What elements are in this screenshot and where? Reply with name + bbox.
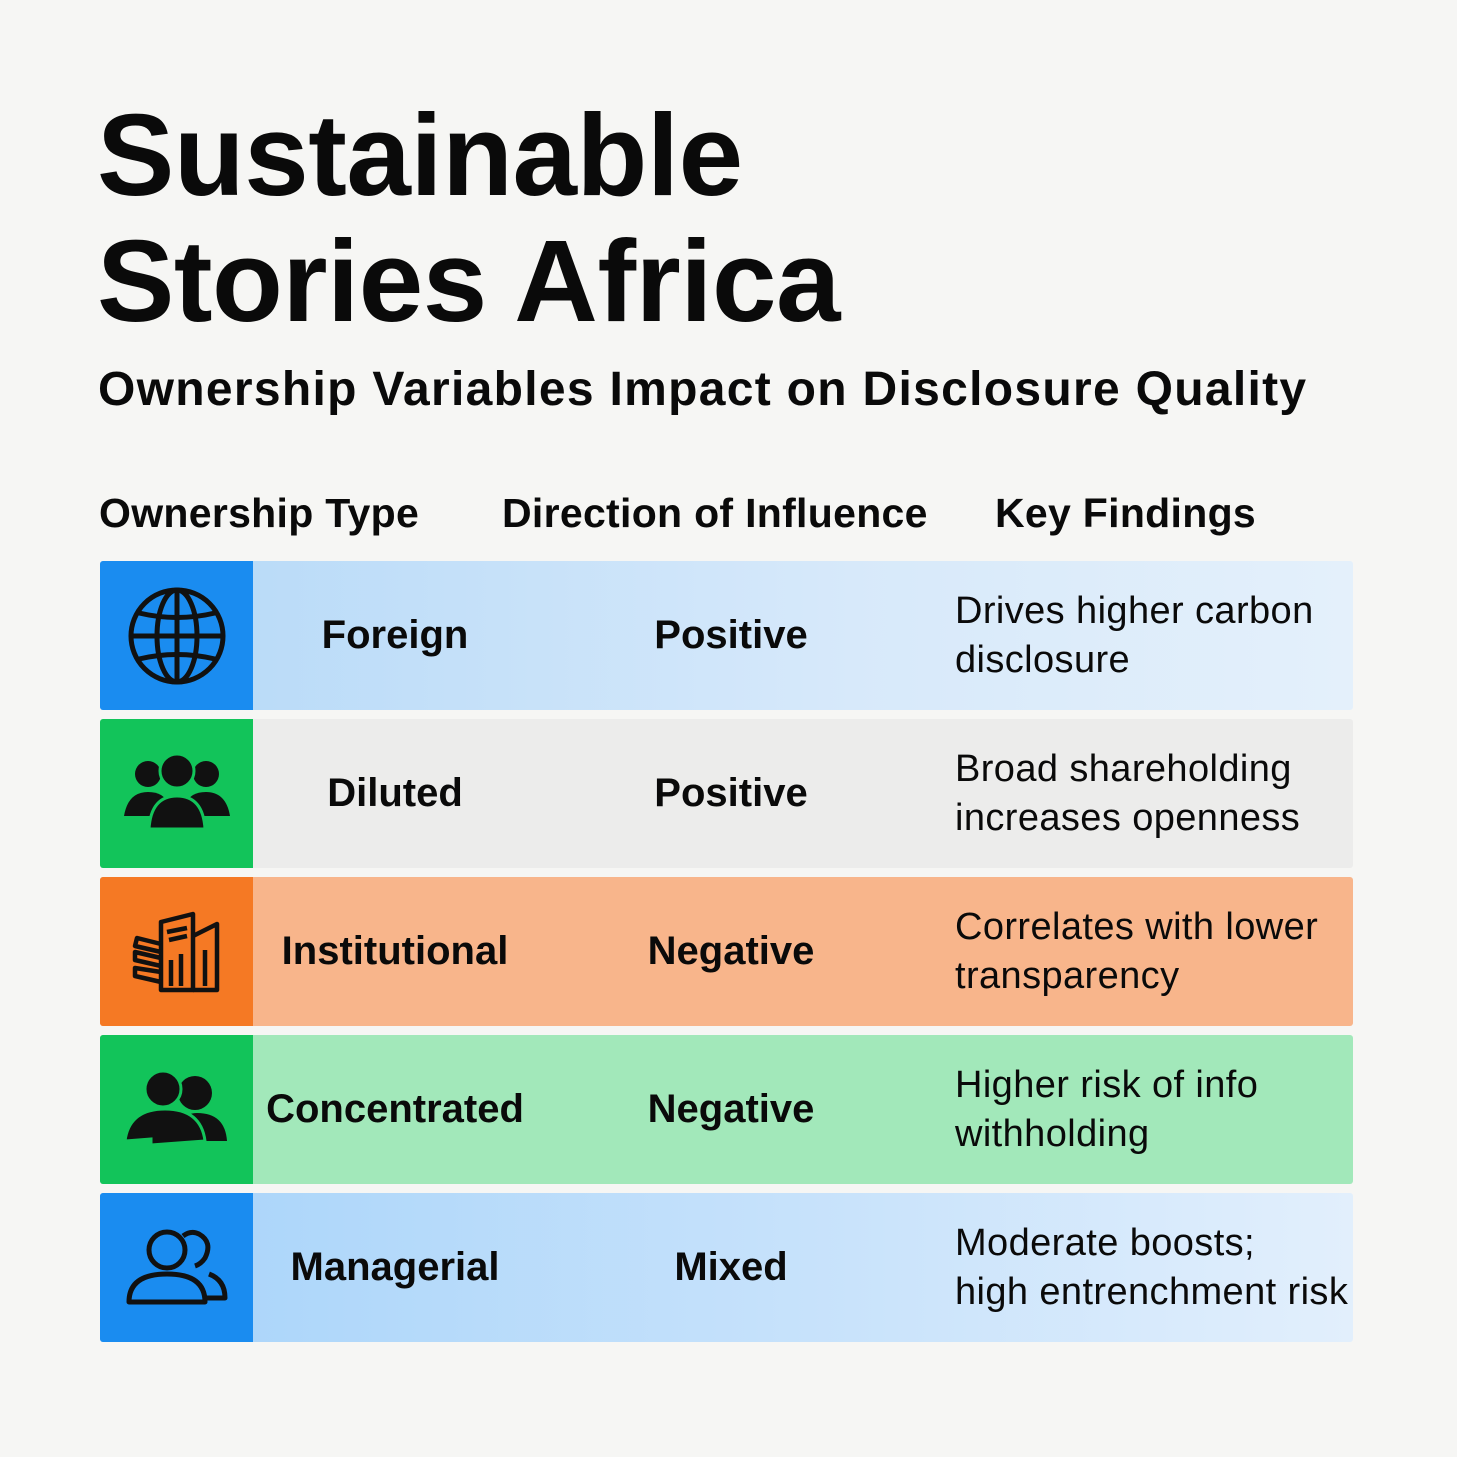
- title: [97, 90, 842, 346]
- title: Stories Africa: [97, 216, 840, 346]
- icon: buildings: [100, 877, 253, 1026]
- icon: people outline: [100, 1193, 253, 1342]
- header: direction: Direction of Influence: [502, 490, 928, 536]
- icon: two people: [100, 1035, 253, 1184]
- icon: globe: [100, 561, 253, 710]
- direction: Negative: [648, 929, 814, 973]
- finding: withholding: [955, 1112, 1150, 1154]
- finding: [955, 590, 1314, 680]
- direction: Positive: [654, 613, 808, 657]
- finding: Correlates with lower: [955, 906, 1318, 948]
- finding: Broad shareholding: [955, 748, 1292, 790]
- type label: Diluted: [327, 771, 463, 815]
- row: institutional: [100, 877, 1353, 1026]
- finding: Moderate boosts;: [955, 1222, 1255, 1264]
- type label: Managerial: [291, 1245, 499, 1289]
- finding: [955, 1064, 1258, 1154]
- header: ownership type: Ownership Type: [99, 490, 419, 536]
- type label: Institutional: [282, 929, 508, 973]
- row: diluted: [100, 719, 1353, 868]
- finding: high entrenchment risk: [955, 1270, 1348, 1312]
- finding: disclosure: [955, 638, 1130, 680]
- direction: Mixed: [674, 1245, 788, 1289]
- finding: [955, 906, 1318, 996]
- header: key findings: Key Findings: [995, 490, 1256, 536]
- title: Sustainable: [97, 90, 743, 220]
- finding: [955, 748, 1300, 838]
- subtitle: Ownership Variables Impact on Disclosure Quality: [98, 363, 1307, 416]
- finding: Drives higher carbon: [955, 590, 1314, 632]
- row: managerial: [100, 1193, 1353, 1342]
- type label: Foreign: [322, 613, 468, 657]
- icon: group: [100, 719, 253, 868]
- finding: Higher risk of info: [955, 1064, 1258, 1106]
- direction: Positive: [654, 771, 808, 815]
- finding: [955, 1222, 1348, 1312]
- finding: increases openness: [955, 796, 1300, 838]
- row: foreign: [100, 561, 1353, 710]
- finding: transparency: [955, 954, 1179, 996]
- row: concentrated: [100, 1035, 1353, 1184]
- direction: Negative: [648, 1087, 814, 1131]
- type label: Concentrated: [266, 1087, 524, 1131]
